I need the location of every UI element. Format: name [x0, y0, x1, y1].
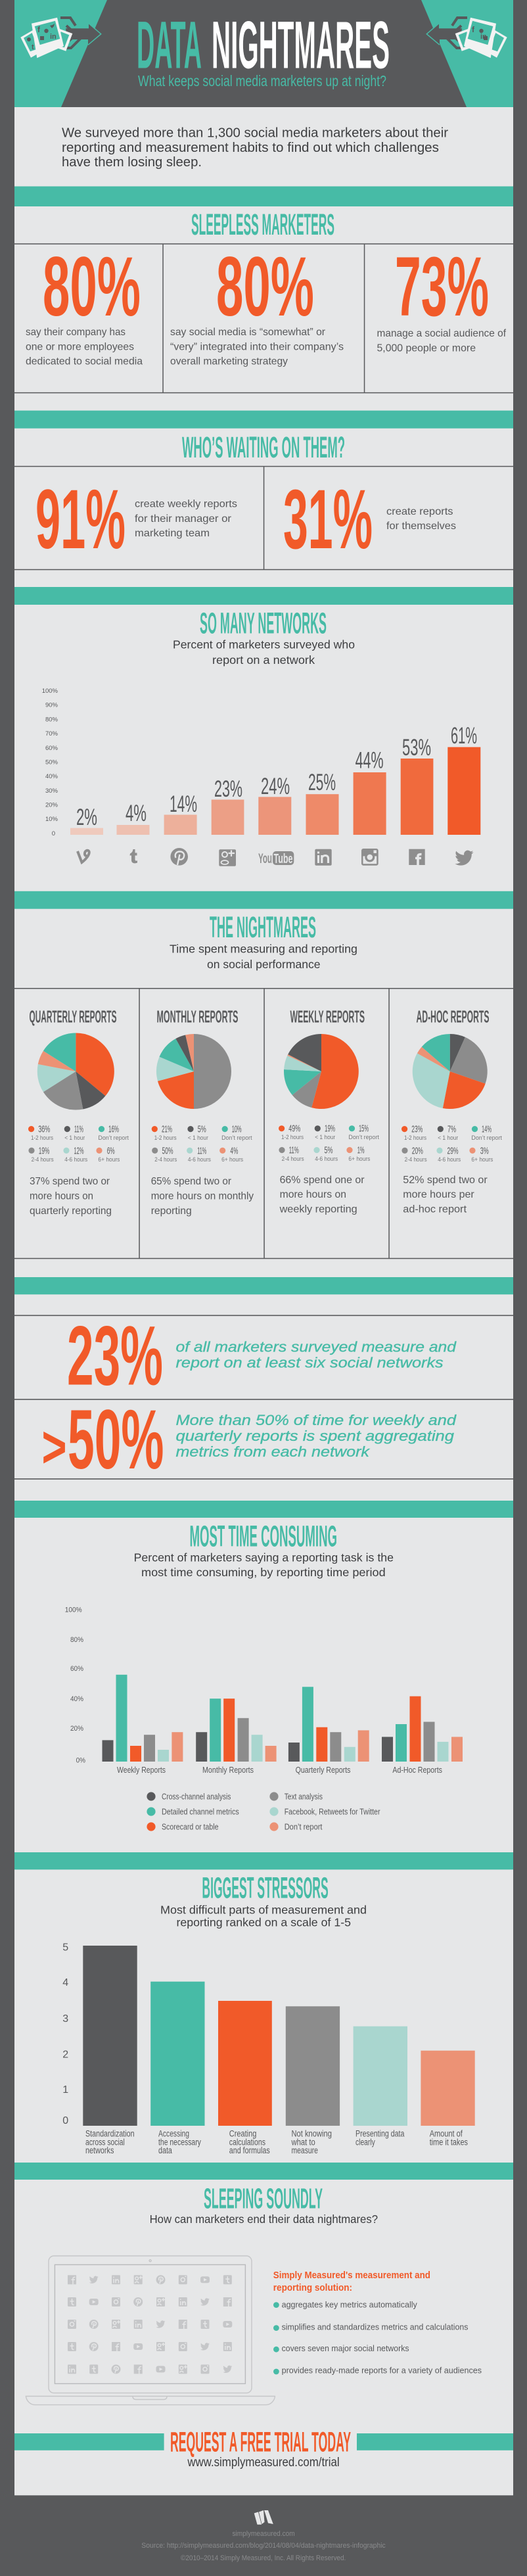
- icon: right social cards and arrows: in: [480, 33, 487, 41]
- title: DATA: [137, 8, 202, 83]
- legend: ad-hoc: 7%: [447, 1124, 456, 1135]
- intro text: We surveyed more than 1,300 social media marketers about their: [62, 126, 448, 140]
- stat 91%: for their manager or: [135, 513, 232, 525]
- y axis labels: 0: [52, 830, 55, 837]
- legend: weekly: 6+ hours: [348, 1156, 371, 1162]
- y axis labels: [42, 688, 58, 837]
- takeaway: monthly: [151, 1176, 254, 1217]
- y axis labels: 40%: [70, 1695, 83, 1703]
- solution text: [273, 2270, 482, 2376]
- weekly bars: [103, 1675, 183, 1762]
- legend: ad-hoc: 29%: [447, 1145, 459, 1156]
- bullet list: provides ready-made reports for a variety of audiences: [282, 2365, 482, 2376]
- icon: laptop with social icons: [26, 2256, 275, 2405]
- y axis labels: 50%: [45, 759, 58, 766]
- bar labels: Not knowing: [292, 2129, 332, 2139]
- bar labels: Accessing: [158, 2129, 189, 2139]
- description: most time consuming, by reporting time period: [141, 1566, 386, 1579]
- footer: ©2010–2014 Simply Measured, Inc. All Rights Reserved.: [181, 2554, 346, 2562]
- bar values: 44%: [355, 748, 384, 774]
- icon: left social cards and arrows: in: [50, 33, 57, 41]
- y axis labels: 90%: [45, 702, 58, 709]
- section band: [14, 891, 513, 909]
- icon: twitter: [455, 851, 474, 866]
- social icon grid row 5: [68, 2364, 232, 2374]
- bar values: 24%: [261, 774, 290, 799]
- bar values: 61%: [451, 723, 477, 749]
- stat over 50%: >: [42, 1415, 67, 1480]
- description: on social performance: [207, 958, 321, 971]
- intro text: [62, 126, 448, 170]
- legend: weekly: Don’t report: [348, 1134, 379, 1140]
- takeaway: quarterly: quarterly reporting: [30, 1206, 112, 1217]
- pie chart: monthly: [156, 1034, 231, 1109]
- stat 31%: for themselves: [386, 521, 456, 532]
- bar labels: calculations: [229, 2137, 265, 2147]
- y axis labels: 100%: [65, 1606, 82, 1614]
- panel: quarterly reports: QUARTERLY REPORTS: [29, 1007, 117, 1027]
- panel: quarterly reports: [28, 1007, 129, 1217]
- social icon grid row 4: [68, 2342, 232, 2351]
- icon: right social cards and arrows: [426, 18, 507, 58]
- stat 80% employees: [26, 240, 143, 367]
- bar labels: the necessary: [158, 2137, 201, 2147]
- legend: monthly: 50%: [162, 1145, 173, 1156]
- legend: weekly: 1%: [357, 1145, 365, 1156]
- takeaway: ad-hoc: ad-hoc report: [403, 1204, 467, 1215]
- stat 80% employees: one or more employees: [26, 342, 134, 353]
- bullet list: aggregates key metrics automatically: [282, 2300, 417, 2310]
- legend: weekly: 49%: [288, 1123, 300, 1135]
- icon: google plus: [219, 849, 236, 866]
- icon: pinterest: [170, 848, 188, 866]
- panel: biggest stressors: BIGGEST STRESSORS: [202, 1871, 329, 1905]
- bullet list: covers seven major social networks: [282, 2343, 409, 2353]
- panel: most time consuming: [65, 1520, 463, 1831]
- chart legend: Facebook, Retweets for Twitter: [285, 1808, 380, 1817]
- stat over 50%: quarterly reports is spent aggregating: [176, 1428, 455, 1444]
- icon: youtube: You: [258, 851, 272, 866]
- monthly bars: [196, 1698, 277, 1762]
- takeaway: ad-hoc: more hours per: [403, 1189, 474, 1200]
- legend: quarterly: 19%: [39, 1145, 49, 1156]
- y axis labels: 70%: [45, 730, 58, 738]
- solution text: Simply Measured's measurement and: [273, 2270, 430, 2281]
- legend: monthly: 10%: [232, 1124, 242, 1135]
- y axis labels: 80%: [70, 1636, 83, 1644]
- stat 23%: [67, 1309, 457, 1403]
- footer: [141, 2510, 386, 2562]
- subtitle: What keeps social media marketers up at night?: [138, 72, 386, 89]
- panel: the nightmares: THE NIGHTMARES: [210, 910, 316, 944]
- legend: monthly: 2-4 hours: [154, 1156, 177, 1163]
- social icon grid row 2: [68, 2297, 232, 2307]
- network icons row: [78, 848, 474, 866]
- legend: monthly: < 1 hour: [188, 1135, 208, 1141]
- panel: sleeping soundly: [26, 2182, 482, 2405]
- grouped bar chart: [65, 1606, 463, 1775]
- panel: weekly reports: WEEKLY REPORTS: [290, 1007, 365, 1027]
- stat 31%: 31%: [283, 473, 373, 567]
- y axis labels: 2: [62, 2049, 68, 2060]
- stat 80% integrated: [170, 240, 344, 367]
- description: Percent of marketers surveyed who: [173, 638, 355, 651]
- legend: weekly: 1-2 hours: [281, 1134, 304, 1140]
- bullet list: simplifies and standardizes metrics and calculations: [282, 2322, 469, 2332]
- legend: monthly: 4%: [230, 1145, 238, 1156]
- stat 23%: report on at least six social networks: [176, 1355, 444, 1371]
- legend: ad-hoc: 23%: [411, 1124, 423, 1135]
- panel: monthly reports: [151, 1007, 254, 1217]
- y axis labels: 3: [62, 2013, 68, 2025]
- stat 31%: create reports: [386, 506, 453, 517]
- bullet list: [273, 2300, 482, 2376]
- panel: monthly reports: MONTHLY REPORTS: [156, 1007, 238, 1027]
- legend: weekly: 5%: [325, 1145, 332, 1156]
- legend: ad-hoc: 2-4 hours: [405, 1156, 427, 1163]
- bar labels: and formulas: [229, 2145, 270, 2155]
- panel: biggest stressors: [62, 1871, 475, 2155]
- legend: monthly: Don’t report: [221, 1135, 252, 1141]
- y axis labels: 0%: [76, 1756, 85, 1764]
- description: [160, 1904, 367, 1929]
- legend: quarterly: 4-6 hours: [64, 1156, 88, 1163]
- panel: weekly reports: [279, 1007, 379, 1215]
- legend: ad-hoc: < 1 hour: [438, 1135, 458, 1141]
- y axis labels: 30%: [45, 787, 58, 795]
- legend: ad-hoc: 20%: [412, 1145, 423, 1156]
- group labels: Weekly Reports: [117, 1766, 166, 1775]
- takeaway: weekly: 66% spend one or: [280, 1175, 365, 1186]
- legend: quarterly: Don’t report: [98, 1135, 129, 1141]
- stat 80% integrated: say social media is “somewhat” or: [170, 327, 326, 338]
- section band: [14, 587, 513, 605]
- section band: [14, 1277, 513, 1294]
- legend: weekly: [279, 1123, 379, 1162]
- panel: sleeping soundly: SLEEPING SOUNDLY: [204, 2182, 323, 2215]
- takeaway: ad-hoc: 52% spend two or: [403, 1175, 488, 1186]
- legend: ad-hoc: 3%: [480, 1145, 489, 1156]
- chart legend: Text analysis: [285, 1792, 323, 1801]
- stat over 50%: metrics from each network: [176, 1443, 370, 1460]
- icon: left social cards and arrows: f: [37, 25, 41, 34]
- takeaway: weekly: weekly reporting: [279, 1204, 357, 1215]
- takeaway: monthly: reporting: [151, 1206, 192, 1217]
- stat 80% employees: 80%: [43, 240, 141, 334]
- takeaway: monthly: 65% spend two or: [151, 1176, 232, 1187]
- icon: vine: [78, 851, 89, 862]
- legend: ad-hoc: 14%: [482, 1124, 492, 1135]
- bar labels: Creating: [229, 2129, 256, 2139]
- bar values: 14%: [170, 791, 197, 817]
- bars: [83, 1946, 475, 2126]
- description: [170, 943, 357, 971]
- bar values: 4%: [126, 801, 147, 826]
- bar values: 2%: [76, 805, 97, 830]
- title: [137, 8, 390, 83]
- legend: monthly: 11%: [197, 1145, 206, 1156]
- takeaway: weekly: [279, 1175, 365, 1215]
- stat 80% integrated: “very” integrated into their company’s: [170, 342, 344, 353]
- chart legend: Don’t report: [285, 1822, 323, 1831]
- section band: [14, 187, 513, 206]
- stat 73%: [377, 240, 507, 354]
- legend: weekly: 2-4 hours: [282, 1156, 304, 1162]
- stat 80% integrated: overall marketing strategy: [170, 356, 288, 367]
- icon: right social cards and arrows: f: [472, 25, 475, 34]
- takeaway: monthly: more hours on monthly: [151, 1190, 254, 1202]
- legend: monthly: 6+ hours: [221, 1156, 244, 1163]
- pie chart: ad-hoc: [413, 1034, 488, 1109]
- y axis labels: 4: [62, 1977, 68, 1988]
- bar labels: Standardization: [85, 2129, 135, 2139]
- header banner: [14, 0, 513, 107]
- panel: ad-hoc reports: [401, 1007, 502, 1215]
- call to action: www.simplymeasured.com/trial: [187, 2456, 340, 2470]
- icon: left social cards and arrows: [20, 18, 101, 58]
- legend: monthly: 5%: [198, 1124, 206, 1135]
- social icon grid row 3: [68, 2320, 232, 2329]
- y axis labels: 80%: [45, 716, 58, 723]
- icon: instagram: [361, 849, 378, 866]
- takeaway: ad-hoc: [403, 1175, 488, 1215]
- bar labels: networks: [85, 2145, 114, 2155]
- stat 73%: manage a social audience of: [377, 328, 507, 339]
- bars: [70, 747, 480, 835]
- icon: tumblr: [130, 849, 137, 863]
- takeaway: quarterly: 37% spend two or: [30, 1176, 110, 1187]
- bar chart: networks: [42, 688, 480, 837]
- legend: monthly: 1-2 hours: [154, 1135, 177, 1141]
- bar values: 25%: [308, 770, 336, 795]
- icon: linkedin: [315, 849, 332, 866]
- icon: left social cards and arrows: t: [32, 43, 34, 51]
- bar values: 53%: [402, 735, 431, 761]
- chart legend: Cross-channel analysis: [162, 1792, 231, 1801]
- y axis labels: 40%: [45, 773, 58, 780]
- description: How can marketers end their data nightmares?: [150, 2213, 378, 2226]
- solution text: reporting solution:: [273, 2282, 352, 2293]
- stat 80% integrated: 80%: [216, 240, 314, 334]
- stat 73%: 5,000 people or more: [377, 343, 476, 354]
- stat 91%: create weekly reports: [135, 498, 237, 510]
- legend: quarterly: 12%: [74, 1145, 84, 1156]
- bar labels: Presenting data: [355, 2129, 405, 2139]
- legend: ad-hoc: 4-6 hours: [438, 1156, 461, 1163]
- section band: [14, 411, 513, 429]
- legend: quarterly: 6+ hours: [98, 1156, 120, 1163]
- y axis labels: 20%: [70, 1725, 83, 1733]
- bar labels: data: [158, 2145, 172, 2155]
- stat over 50%: [42, 1393, 457, 1487]
- legend: quarterly: [28, 1124, 129, 1163]
- takeaway: quarterly: [30, 1176, 112, 1217]
- stat 23%: of all marketers surveyed measure and: [176, 1339, 457, 1355]
- legend: monthly: 21%: [162, 1124, 172, 1135]
- legend: quarterly: 6%: [107, 1145, 115, 1156]
- legend: monthly: 4-6 hours: [188, 1156, 211, 1163]
- legend: quarterly: 11%: [74, 1124, 83, 1135]
- bar values: [76, 723, 477, 830]
- bar labels: Amount of: [430, 2129, 463, 2139]
- legend: ad-hoc: 1-2 hours: [404, 1135, 426, 1141]
- footer: Source: http://simplymeasured.com/blog/2014/08/04/data-nightmares-infographic: [141, 2542, 386, 2550]
- legend: quarterly: 2-4 hours: [32, 1156, 54, 1163]
- legend: ad-hoc: 6+ hours: [471, 1156, 493, 1163]
- legend: weekly: 15%: [359, 1123, 369, 1135]
- group labels: Quarterly Reports: [296, 1766, 351, 1775]
- pie chart: quarterly: [37, 1033, 114, 1110]
- description: Time spent measuring and reporting: [170, 943, 357, 956]
- y axis labels: [65, 1606, 85, 1764]
- bar labels: [85, 2129, 468, 2155]
- y axis labels: [62, 1942, 68, 2126]
- legend: quarterly: 1-2 hours: [31, 1135, 53, 1141]
- group labels: Monthly Reports: [202, 1766, 254, 1775]
- bar labels: time it takes: [430, 2137, 468, 2147]
- y axis labels: 60%: [70, 1665, 83, 1673]
- social icon grid row 1: [68, 2275, 232, 2284]
- description: [134, 1551, 394, 1579]
- panel: sleepless marketers: [14, 208, 513, 393]
- chart legend: [147, 1792, 380, 1831]
- legend: weekly: 19%: [325, 1123, 335, 1135]
- legend: quarterly: 36%: [38, 1124, 50, 1135]
- description: Percent of marketers saying a reporting task is the: [134, 1551, 394, 1564]
- logo: [254, 2510, 273, 2525]
- y axis labels: 5: [62, 1942, 68, 1954]
- description: reporting ranked on a scale of 1-5: [176, 1915, 351, 1929]
- stat 91%: 91%: [35, 473, 126, 567]
- bar labels: clearly: [355, 2137, 375, 2147]
- legend: quarterly: < 1 hour: [64, 1135, 85, 1141]
- stat 23%: 23%: [67, 1309, 163, 1403]
- description: Most difficult parts of measurement and: [160, 1904, 367, 1917]
- panel: the nightmares: [14, 910, 513, 1259]
- section band: [14, 1852, 513, 1869]
- call to action: [14, 2427, 513, 2470]
- description: [173, 638, 355, 667]
- group labels: [117, 1766, 442, 1775]
- quarterly bars: [288, 1687, 369, 1762]
- stat over 50%: More than 50% of time for weekly and: [176, 1412, 457, 1428]
- bar chart: stressors: [62, 1942, 475, 2155]
- legend: quarterly: 16%: [108, 1124, 119, 1135]
- bar values: 23%: [214, 776, 242, 802]
- chart legend: Scorecard or table: [162, 1822, 219, 1831]
- section band: [14, 1501, 513, 1518]
- y axis labels: 20%: [45, 802, 58, 808]
- panel: key statistics: [14, 1309, 513, 1487]
- pie chart: weekly: [284, 1034, 359, 1109]
- legend: ad-hoc: Don’t report: [471, 1135, 502, 1141]
- y axis labels: 60%: [45, 745, 58, 752]
- legend: weekly: 4-6 hours: [315, 1156, 338, 1162]
- y axis labels: 100%: [42, 688, 58, 695]
- stat 80% employees: say their company has: [26, 327, 126, 338]
- y axis labels: 10%: [45, 816, 58, 823]
- panel: so many networks: [42, 606, 480, 866]
- intro text: reporting and measurement habits to find out which challenges: [62, 141, 439, 155]
- stat 80% employees: dedicated to social media: [26, 356, 143, 367]
- group labels: Ad-Hoc Reports: [392, 1766, 442, 1775]
- legend: monthly: [152, 1124, 252, 1163]
- description: report on a network: [212, 653, 315, 667]
- chart legend: Detailed channel metrics: [162, 1808, 239, 1817]
- legend: weekly: < 1 hour: [315, 1134, 335, 1140]
- bar labels: measure: [292, 2145, 318, 2155]
- legend: weekly: 11%: [289, 1145, 299, 1156]
- panel: who's waiting on them: [14, 431, 513, 570]
- panel: so many networks: SO MANY NETWORKS: [200, 606, 327, 640]
- takeaway: weekly: more hours on: [280, 1189, 346, 1200]
- icon: facebook: [409, 849, 425, 865]
- footer: simplymeasured.com: [233, 2530, 295, 2538]
- bar labels: what to: [291, 2137, 315, 2147]
- icon: youtube: Tube: [273, 852, 293, 866]
- intro text: have them losing sleep.: [62, 155, 202, 170]
- y axis labels: 0: [62, 2115, 68, 2126]
- ad-hoc bars: [382, 1697, 463, 1762]
- y axis labels: 1: [62, 2084, 68, 2096]
- section band: [14, 2163, 513, 2180]
- legend: ad-hoc: [401, 1124, 502, 1163]
- stat 91%: marketing team: [135, 528, 210, 539]
- stat over 50%: 50%: [68, 1393, 164, 1487]
- takeaway: quarterly: more hours on: [30, 1190, 93, 1202]
- bar labels: across social: [85, 2137, 125, 2147]
